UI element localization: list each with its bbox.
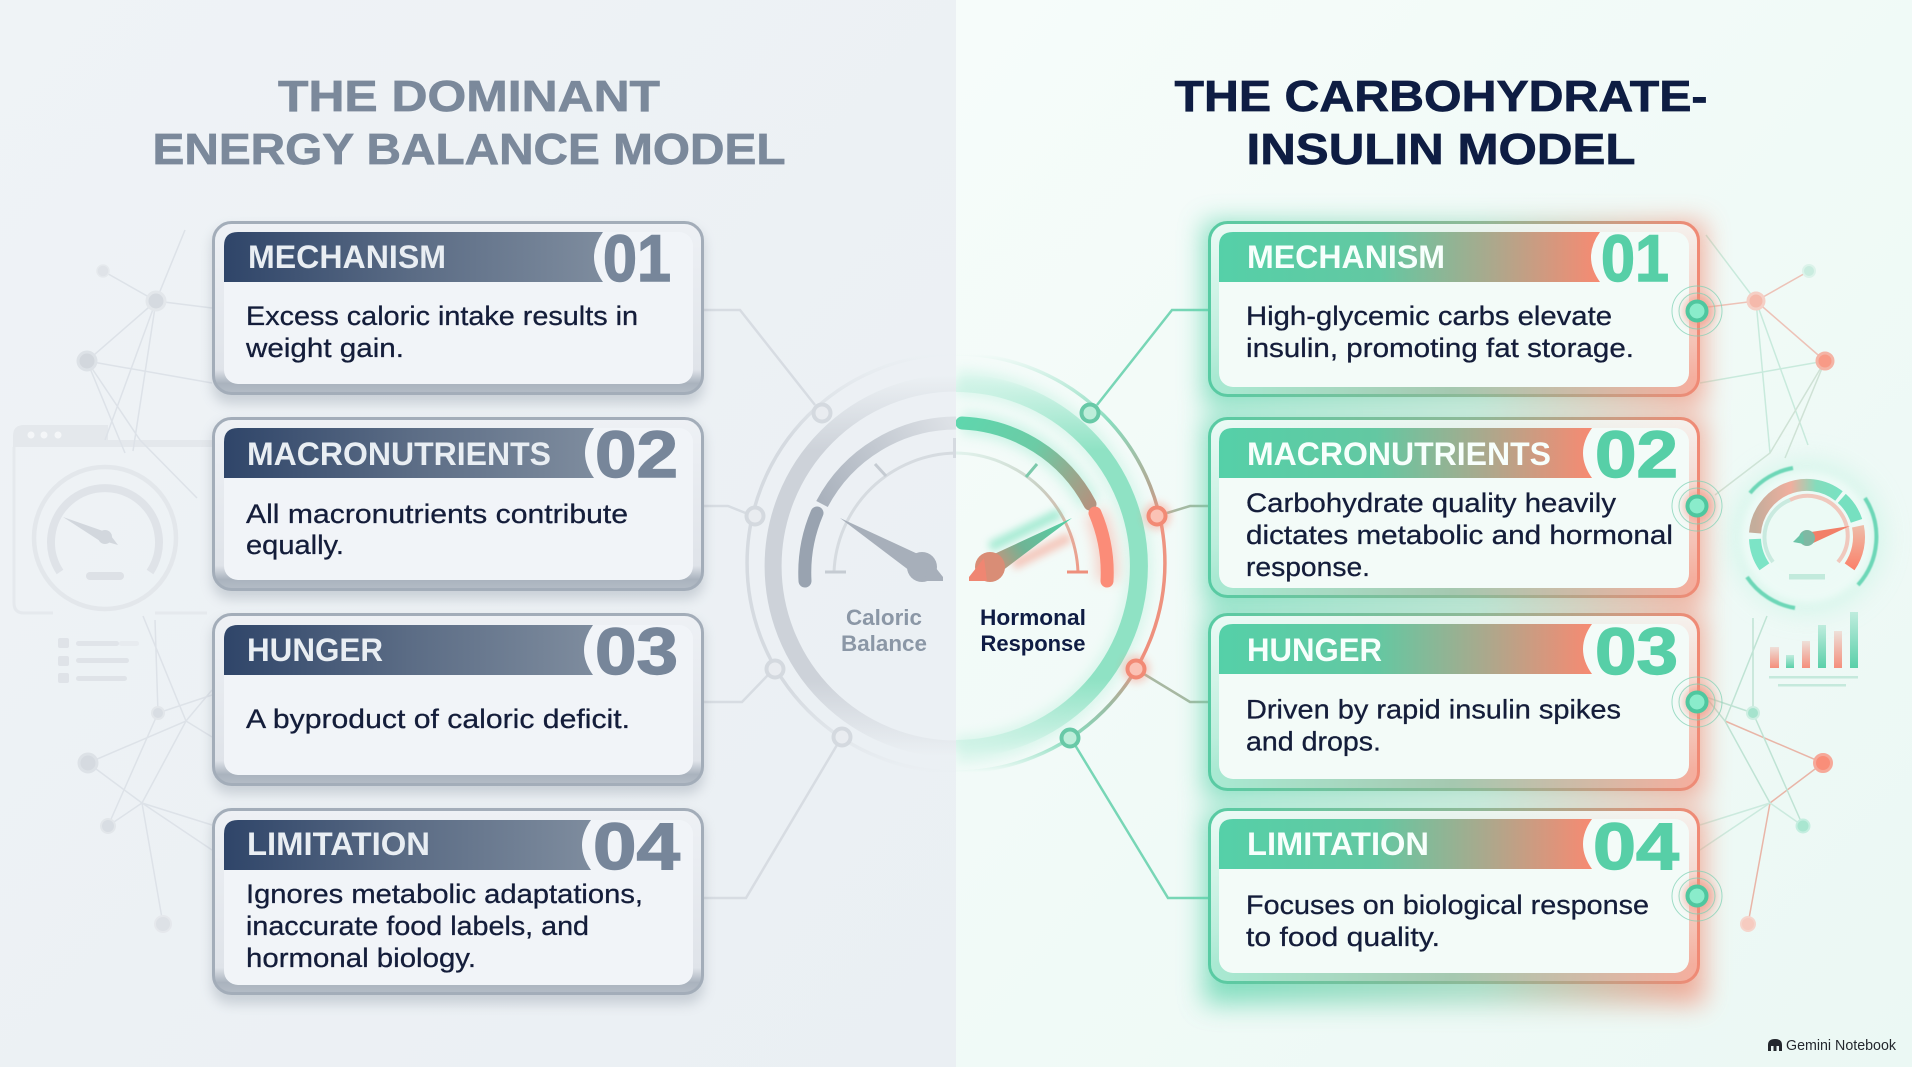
label: Caloric Balance: Caloric bbox=[846, 605, 922, 630]
panel: right card 02 macronutrients bbox=[1210, 417, 1698, 596]
panel: left card 02 macronutrients: MACRONUTRIENTS bbox=[247, 436, 551, 472]
label: Hormonal Response bbox=[980, 605, 1086, 656]
node: macronutrients bbox=[1672, 481, 1722, 531]
node: limitation bbox=[1672, 871, 1722, 921]
panel: left card 01 mechanism: MECHANISM bbox=[248, 239, 446, 275]
connectors: right cards to gauge bbox=[1075, 310, 1208, 898]
panel: right card 04 limitation: 04 bbox=[1593, 809, 1679, 883]
panel: left card 02 macronutrients: All macronutrients contribute bbox=[246, 499, 628, 529]
panel: right background bbox=[956, 0, 1912, 1067]
right card outer glows bbox=[1204, 222, 1704, 1004]
panel: left card 02 macronutrients: equally. bbox=[246, 530, 344, 560]
right central gauge with connectors bbox=[956, 310, 1208, 898]
connectors: left cards to gauge bbox=[704, 310, 837, 898]
panel: left card 04 limitation bbox=[212, 809, 704, 1004]
panel: right card 04 limitation: LIMITATION bbox=[1247, 826, 1429, 862]
panel: left card 01 mechanism: 01 bbox=[603, 221, 671, 295]
panel: left card 04 limitation: hormonal biology. bbox=[246, 943, 476, 973]
label: Caloric Balance bbox=[841, 605, 927, 656]
panel: left card 01 mechanism: weight gain. bbox=[245, 333, 404, 363]
panel: left card 04 limitation: inaccurate food labels, and bbox=[246, 911, 589, 941]
label: Hormonal Response: Hormonal bbox=[980, 605, 1086, 630]
panel: left card 03 hunger: 03 bbox=[595, 614, 678, 688]
panel: left card 04 limitation: 04 bbox=[593, 809, 680, 883]
panel: right card 02 macronutrients: 02 bbox=[1595, 417, 1678, 491]
panel: right card 01 mechanism: insulin, promoting fat storage. bbox=[1246, 333, 1634, 363]
gauge rings: left half bbox=[746, 384, 956, 734]
panel: right card 04 limitation bbox=[1210, 809, 1698, 982]
panel: left background bbox=[0, 0, 956, 1067]
title: energy balance model: ENERGY BALANCE MODEL bbox=[152, 125, 786, 174]
title: carbohydrate-insulin model: THE CARBOHYDRATE- bbox=[1174, 72, 1708, 121]
panel: right card 02 macronutrients: response. bbox=[1246, 552, 1370, 582]
panel: right card 03 hunger: HUNGER bbox=[1247, 632, 1382, 668]
panel: right card 01 mechanism: High-glycemic carbs elevate bbox=[1246, 301, 1612, 331]
chart: small bar chart bbox=[1769, 612, 1858, 686]
network graph: upper right bbox=[1700, 235, 1833, 495]
panel: left card 03 hunger: A byproduct of caloric deficit. bbox=[246, 704, 630, 734]
panel: left card 03 hunger: HUNGER bbox=[247, 632, 383, 668]
right background decoration: network bbox=[1700, 235, 1883, 931]
network graph: lower right bbox=[1700, 616, 1832, 931]
panel: right card 03 hunger bbox=[1210, 614, 1698, 790]
panel: left card 01 mechanism bbox=[212, 221, 704, 404]
panel: right card 03 hunger: and drops. bbox=[1246, 726, 1381, 756]
panel: left card 02 macronutrients: 02 bbox=[595, 417, 678, 491]
panel: left card 03 hunger bbox=[212, 614, 704, 794]
node: mechanism bbox=[1672, 286, 1722, 336]
title: energy balance model bbox=[152, 72, 786, 174]
panel: right card 02 macronutrients: Carbohydrate quality heavily bbox=[1246, 488, 1617, 518]
panel: right card 01 mechanism bbox=[1210, 221, 1698, 396]
label: Hormonal Response: Response bbox=[980, 631, 1086, 656]
left central gauge with connectors bbox=[704, 310, 956, 898]
panel: left card 04 limitation: LIMITATION bbox=[247, 826, 430, 862]
gauge nodes: left bbox=[746, 404, 850, 746]
gauge needle: hormonal response bbox=[969, 513, 1072, 582]
card pulse nodes on right edge bbox=[1672, 286, 1722, 921]
panel: right card 02 macronutrients: MACRONUTRIENTS bbox=[1247, 436, 1551, 472]
network graph: lower left bbox=[79, 616, 212, 932]
icon: faded browser window with gauge bbox=[13, 425, 212, 683]
panel: right card 01 mechanism: MECHANISM bbox=[1247, 239, 1445, 275]
panel: left card 01 mechanism: Excess caloric intake results in bbox=[246, 301, 638, 331]
left background decoration: network and window bbox=[13, 230, 212, 932]
panel: right card 03 hunger: Driven by rapid insulin spikes bbox=[1246, 694, 1621, 724]
label: Caloric Balance: Balance bbox=[841, 631, 927, 656]
title: energy balance model: THE DOMINANT bbox=[278, 72, 660, 121]
gauge rings: right half bbox=[956, 354, 1165, 772]
panel: left card 04 limitation: Ignores metabolic adaptations, bbox=[246, 879, 643, 909]
watermark: Gemini Notebook: Gemini Notebook bbox=[1786, 1038, 1897, 1054]
node: hunger bbox=[1672, 677, 1722, 727]
gauge needle: caloric balance bbox=[840, 518, 943, 582]
icon: small right gauge bbox=[1731, 461, 1883, 613]
network graph: upper left bbox=[78, 230, 212, 498]
title: carbohydrate-insulin model bbox=[1174, 72, 1708, 174]
panel: left card 02 macronutrients bbox=[212, 417, 704, 599]
panel: right card 04 limitation: to food quality. bbox=[1246, 922, 1440, 952]
panel: right card 03 hunger: 03 bbox=[1595, 614, 1678, 688]
panel: right card 01 mechanism: 01 bbox=[1601, 221, 1669, 295]
panel: right card 04 limitation: Focuses on biological response bbox=[1246, 890, 1649, 920]
title: carbohydrate-insulin model: INSULIN MODEL bbox=[1246, 125, 1636, 174]
panel: right card 02 macronutrients: dictates metabolic and hormonal bbox=[1246, 520, 1673, 550]
gauge nodes: right bbox=[1062, 404, 1171, 746]
